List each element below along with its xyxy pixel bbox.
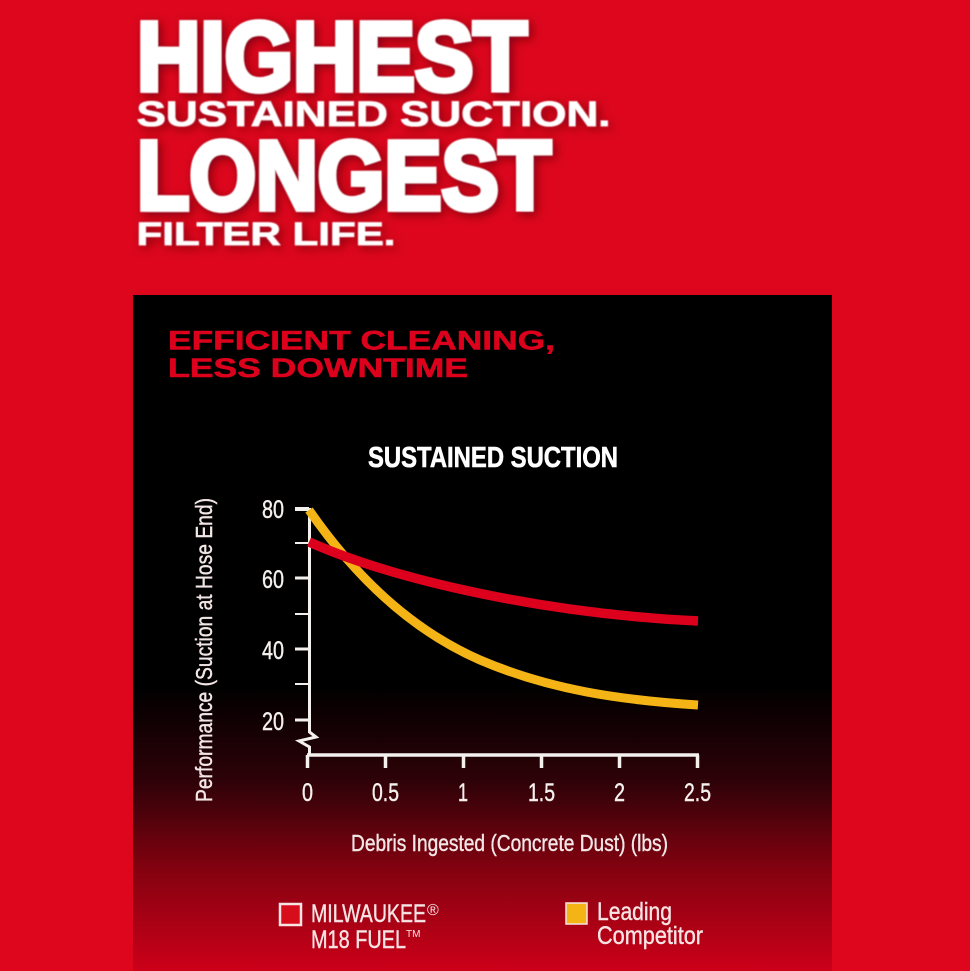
x axis <box>307 755 699 768</box>
x axis labels <box>302 779 711 807</box>
x axis labels: 1 <box>458 779 468 807</box>
legend: Milwaukee M18 Fuel <box>280 900 439 954</box>
x axis labels: 2 <box>614 779 625 807</box>
chart: suction curves <box>262 496 711 807</box>
legend: Leading Competitor: Competitor <box>597 922 703 950</box>
heading: LONGEST: LONGEST <box>137 121 551 230</box>
y axis labels <box>262 496 284 736</box>
x-axis title: Debris Ingested (Concrete Dust) (lbs) <box>351 830 668 856</box>
x axis labels: 0.5 <box>372 779 399 807</box>
y-axis title: Performance (Suction at Hose End) <box>191 498 217 802</box>
legend: Milwaukee M18 Fuel: TM <box>406 929 420 940</box>
subheading: FILTER LIFE.: FILTER LIFE. <box>136 216 396 252</box>
legend: Milwaukee M18 Fuel: MILWAUKEE <box>311 900 426 928</box>
legend: Leading Competitor: Leading <box>597 898 672 926</box>
y axis labels: 20 <box>262 708 284 736</box>
y axis labels: 40 <box>262 637 284 665</box>
heading: HIGHEST: HIGHEST <box>137 2 527 111</box>
legend: Milwaukee M18 Fuel: ® <box>427 902 439 919</box>
legend: Leading Competitor <box>566 898 703 950</box>
headline <box>136 2 610 252</box>
curve: Milwaukee M18 Fuel <box>309 542 698 621</box>
panel heading: LESS DOWNTIME <box>168 353 468 383</box>
x axis labels: 1.5 <box>528 779 555 807</box>
x axis labels: 0 <box>302 779 313 807</box>
panel: chart panel <box>133 295 832 971</box>
subheading: SUSTAINED SUCTION.: SUSTAINED SUCTION. <box>136 95 610 134</box>
chart title: SUSTAINED SUCTION <box>368 442 618 474</box>
y axis labels: 80 <box>262 496 284 524</box>
x axis labels: 2.5 <box>684 779 711 807</box>
panel heading: EFFICIENT CLEANING, <box>168 326 555 356</box>
curve: leading competitor <box>309 510 698 705</box>
panel heading <box>168 326 555 383</box>
legend: Milwaukee M18 Fuel: M18 FUEL <box>311 926 406 954</box>
y axis <box>295 508 316 755</box>
y axis labels: 60 <box>262 566 284 594</box>
